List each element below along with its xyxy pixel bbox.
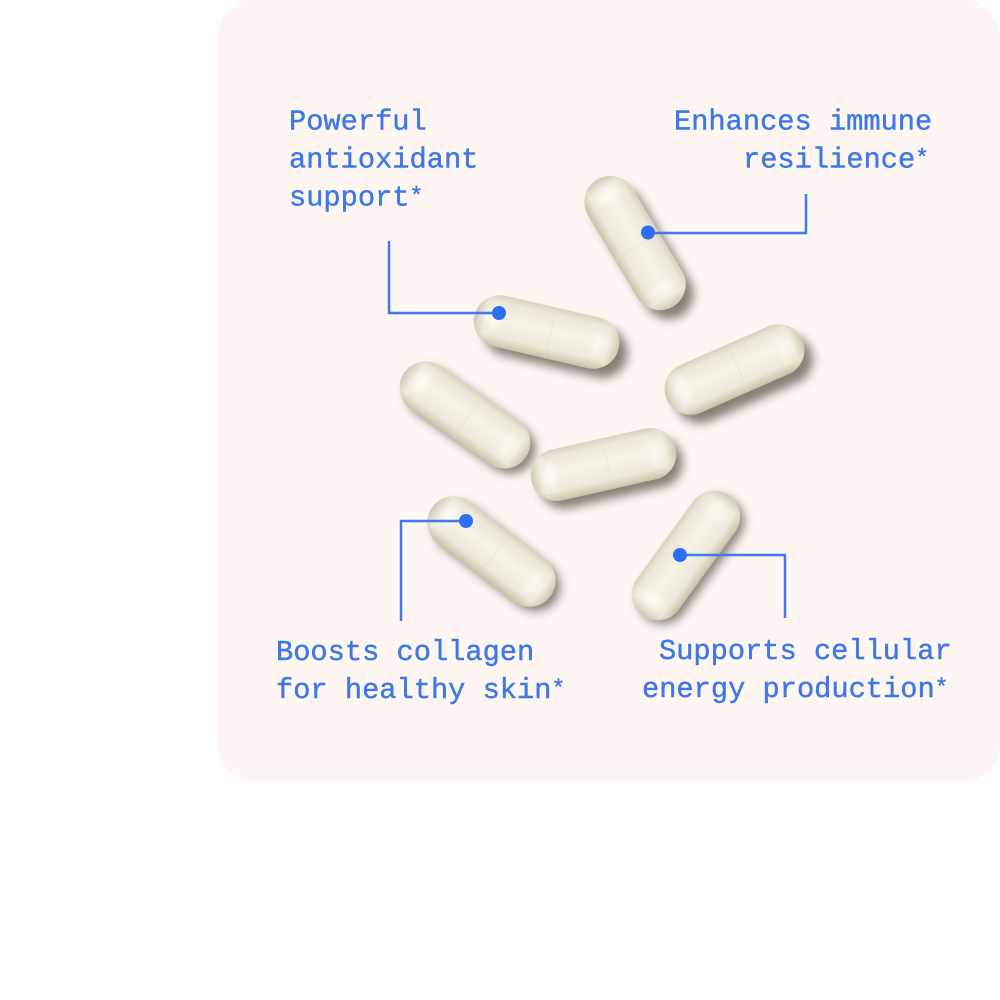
callout: immune resilience xyxy=(641,106,932,240)
capsule: right xyxy=(656,316,821,431)
callout: immune resilience: resilience xyxy=(743,144,915,176)
callout: immune resilience: Enhances immune xyxy=(674,106,932,138)
callout: collagen xyxy=(276,514,565,707)
capsule: lower left xyxy=(417,486,570,621)
capsule: center xyxy=(526,423,688,513)
capsule: top xyxy=(575,166,703,328)
capsule group xyxy=(389,166,821,634)
panel: pink background xyxy=(218,0,1000,781)
callout: collagen: * xyxy=(551,676,565,702)
callout: collagen: Boosts collagen xyxy=(276,636,534,669)
callout: antioxidant support xyxy=(289,106,506,320)
callout: antioxidant support: support xyxy=(289,182,410,214)
capsule: lower right xyxy=(621,480,754,634)
callout: antioxidant support: antioxidant xyxy=(289,144,478,176)
callout: collagen: for healthy skin xyxy=(276,674,551,707)
capsule: upper middle xyxy=(469,290,633,383)
callout: cellular energy: * xyxy=(935,676,948,702)
capsule: left xyxy=(389,351,545,483)
callout: cellular energy xyxy=(642,548,952,706)
callout: antioxidant support: Powerful xyxy=(289,106,427,138)
callout: cellular energy: energy production xyxy=(642,673,935,706)
callout: antioxidant support: * xyxy=(410,184,423,210)
callout: immune resilience: * xyxy=(915,146,929,172)
callout: cellular energy: Supports cellular xyxy=(659,635,952,668)
